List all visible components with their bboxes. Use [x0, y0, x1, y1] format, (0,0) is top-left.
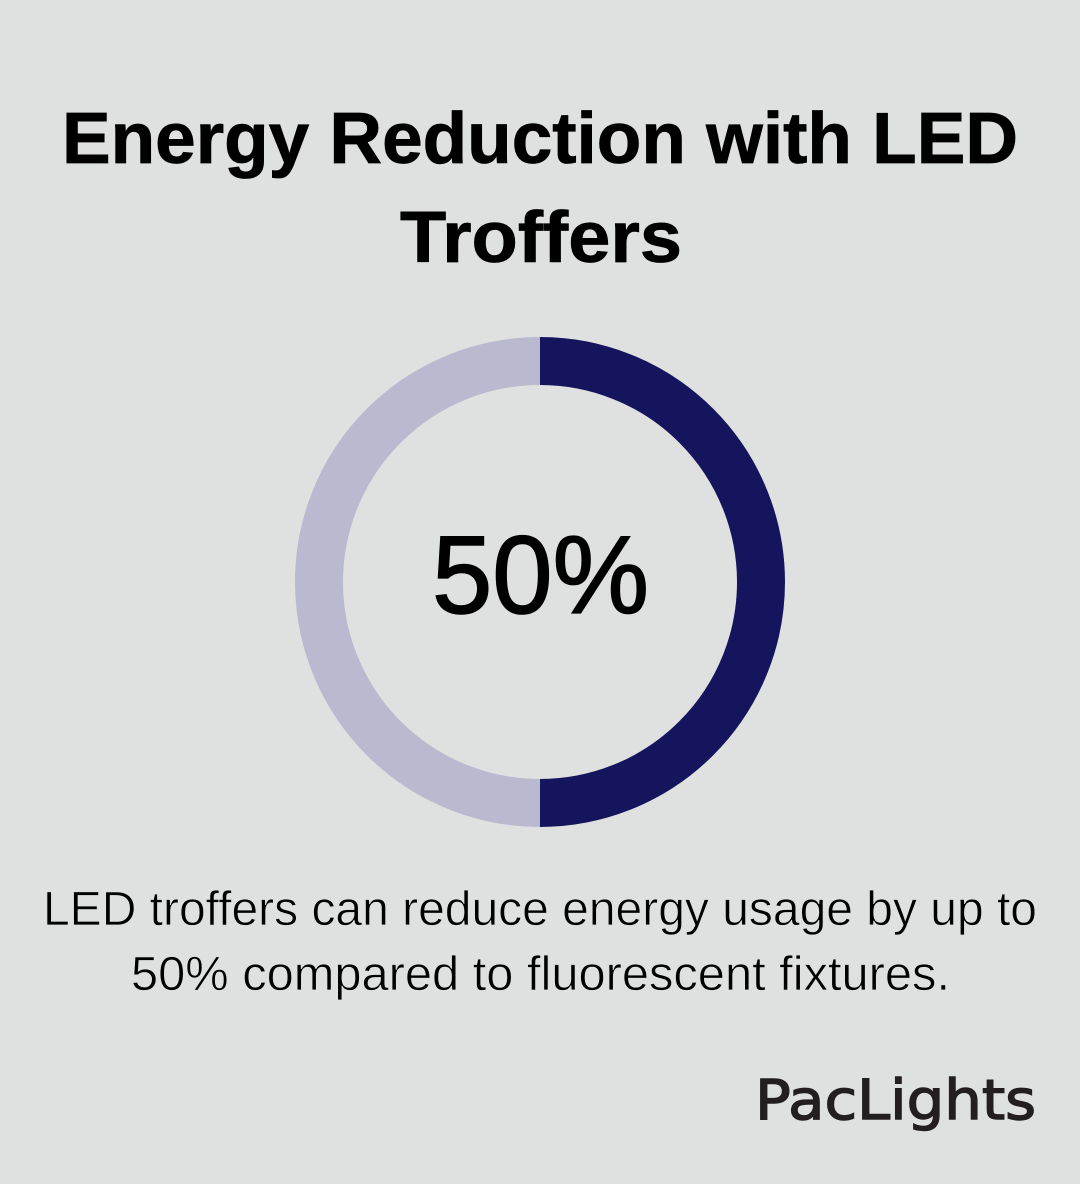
title: Troffers — [400, 198, 682, 278]
description text — [43, 883, 1037, 1001]
title — [62, 99, 1018, 278]
description text: LED troffers can reduce energy usage by up to — [43, 883, 1037, 936]
donut remainder segment — [319, 361, 540, 803]
donut value segment — [540, 361, 761, 803]
center value: 50% — [432, 514, 649, 637]
title: Energy Reduction with LED — [62, 99, 1018, 179]
donut chart: 50% — [319, 361, 761, 803]
description text: 50% compared to fluorescent fixtures. — [131, 948, 950, 1001]
logo: PacLights: PacLights — [755, 1068, 1036, 1132]
